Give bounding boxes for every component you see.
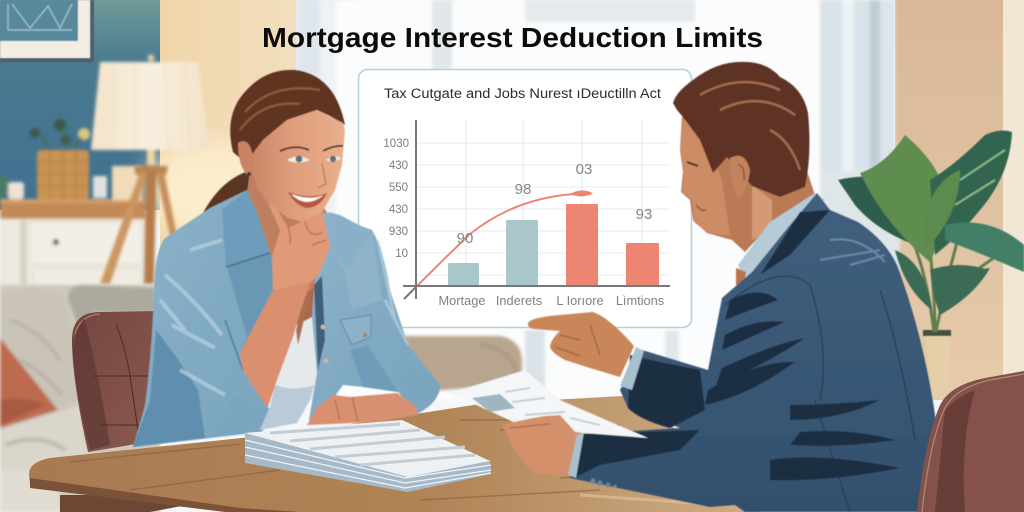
shirt cuffs [620, 347, 644, 390]
y axis labels: 10 [395, 248, 408, 260]
y axis labels: 550 [389, 182, 408, 194]
man [450, 62, 937, 512]
ear [238, 141, 254, 175]
y axis labels: 430 [389, 160, 408, 172]
y axis labels: 1030 [383, 138, 409, 150]
table [29, 395, 760, 512]
neck and face [680, 100, 815, 252]
bar value labels: 98 [515, 181, 531, 198]
bars [448, 204, 659, 286]
sofa with cushions [0, 285, 522, 512]
shirt pocket and buttons [340, 315, 371, 345]
document stack [245, 420, 491, 492]
y axis labels: 930 [389, 226, 408, 238]
bar value labels: 90 [457, 230, 473, 247]
denim shirt left side and sleeve [133, 190, 274, 447]
tie knot [736, 268, 746, 285]
main title: Mortgage Interest Deduction Limits [262, 22, 763, 53]
shirt right front and sleeve [309, 212, 440, 420]
chart title: Tax Cutgate and Jobs Nurest ıDeuctilln Act [384, 86, 661, 102]
jacket buttons [590, 478, 617, 488]
chart panel [358, 70, 692, 328]
ponytail [203, 170, 262, 213]
eye and mouth [687, 162, 698, 166]
left chair [72, 311, 160, 452]
shirt backing behind arm [222, 248, 280, 353]
wall art frame [0, 0, 94, 62]
hair [673, 62, 809, 197]
forearm under chin [240, 283, 310, 407]
jacket shading [574, 210, 900, 480]
trend curve [417, 190, 593, 286]
suit jacket [570, 193, 937, 512]
hand on chin [268, 203, 330, 290]
x axis labels: Lìmtions [616, 293, 664, 308]
bar value labels: 93 [636, 206, 652, 223]
right chair [917, 371, 1024, 512]
floor lamp [91, 54, 210, 284]
x axis labels [439, 293, 664, 308]
pointing hand [528, 312, 634, 377]
rolled cuff right [395, 362, 440, 414]
woman [133, 70, 440, 447]
plant [838, 131, 1024, 400]
eyes and brows [280, 146, 343, 151]
hair [230, 70, 345, 160]
gridlines [416, 121, 670, 286]
x axis labels: Mortage [439, 293, 485, 308]
x axis labels: L Iorıore [556, 293, 604, 308]
collar left [222, 190, 270, 267]
bar value labels [457, 161, 652, 247]
shirt collar right [328, 212, 372, 268]
far forearm and hand [307, 393, 417, 425]
lower hand [502, 415, 577, 475]
shirt collar [738, 193, 825, 282]
window with frames [298, 0, 900, 400]
ear [730, 156, 750, 198]
smile [288, 192, 327, 208]
x axis labels: Inderets [496, 293, 542, 308]
document in hand [450, 370, 648, 438]
undershirt [260, 317, 317, 430]
axes [403, 120, 670, 299]
y axis labels [383, 138, 409, 260]
dresser with decor [0, 119, 146, 290]
bar value labels: 03 [576, 161, 592, 178]
y axis labels: 430 [389, 204, 408, 216]
face [250, 110, 345, 223]
neck and chest [247, 170, 330, 327]
